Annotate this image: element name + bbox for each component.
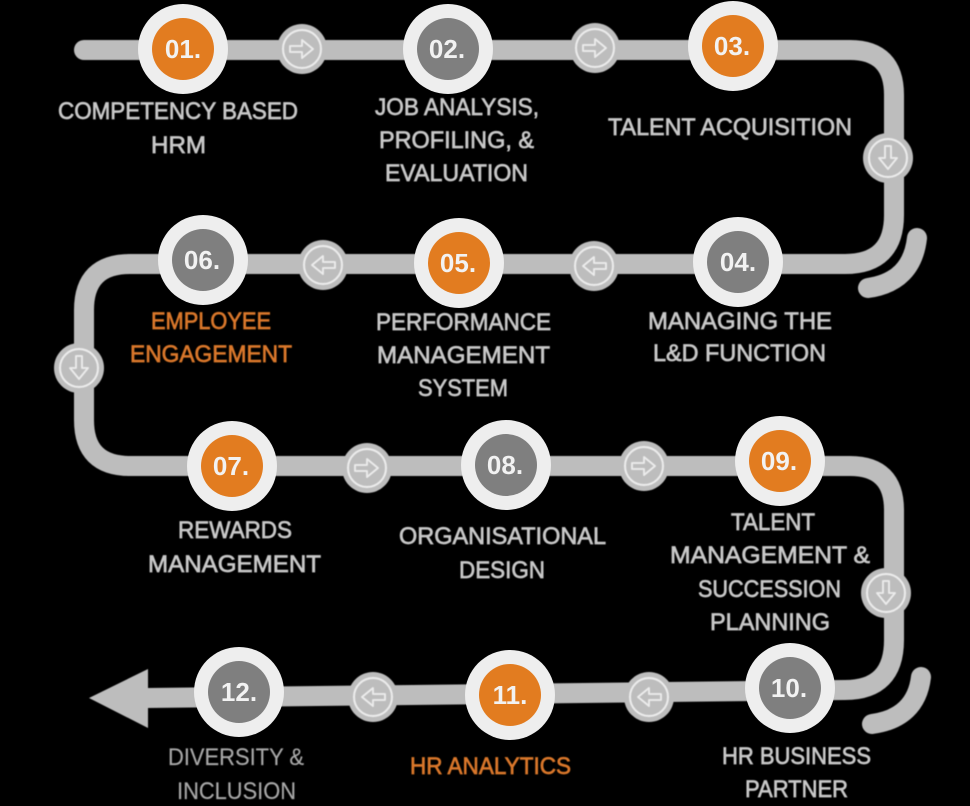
arrow node: 07 to 08 xyxy=(342,443,392,493)
label: job analysis xyxy=(375,94,539,187)
label: employee engagement: EMPLOYEE xyxy=(151,308,271,335)
label: job analysis: PROFILING, & xyxy=(379,127,534,154)
label: talent management and succession planning: SUCCESSION xyxy=(698,576,841,603)
step badge 09: 09. xyxy=(761,446,797,476)
label: talent management and succession planning: MANAGEMENT & xyxy=(670,542,870,569)
step badge 07: 07. xyxy=(213,451,249,481)
step badge 12 xyxy=(194,647,284,737)
step badge 08: 08. xyxy=(487,450,523,480)
step badge 10 xyxy=(745,643,835,733)
step badge 12: 12. xyxy=(221,677,257,707)
label: managing the L&D function xyxy=(648,308,832,367)
label: competency based HRM: COMPETENCY BASED xyxy=(58,98,298,125)
step badge 07 xyxy=(187,421,277,511)
label: talent acquisition: TALENT ACQUISITION xyxy=(608,114,852,141)
label: talent management and succession planning xyxy=(670,509,870,636)
arrow node: 01 to 02 xyxy=(277,24,327,74)
arrow node: 08 to 09 xyxy=(619,441,669,491)
arrow node: 04 to 05 xyxy=(569,241,619,291)
step badge 06 xyxy=(158,215,248,305)
label: job analysis: EVALUATION xyxy=(385,160,528,187)
label: HR business partner: PARTNER xyxy=(745,776,848,803)
curved accent: lower right xyxy=(872,677,921,724)
arrow node: 05 to 06 xyxy=(298,240,348,290)
label: HR business partner: HR BUSINESS xyxy=(722,743,871,770)
step badge 11: 11. xyxy=(493,680,527,710)
label: performance management system: MANAGEMENT xyxy=(377,342,550,369)
label: talent management and succession planning: TALENT xyxy=(731,509,815,536)
label: employee engagement xyxy=(130,308,292,368)
label: managing the L&D function: MANAGING THE xyxy=(648,308,832,335)
step badge 03: 03. xyxy=(714,31,750,61)
end arrowhead xyxy=(89,669,148,728)
label: managing the L&D function: L&D FUNCTION xyxy=(653,340,826,367)
step badge 11 xyxy=(465,650,555,740)
serpentine path xyxy=(84,50,894,728)
step badge 02 xyxy=(403,4,493,94)
step badge 04: 04. xyxy=(720,247,756,277)
curved accent: upper right xyxy=(868,238,917,288)
label: rewards management xyxy=(148,517,321,578)
label: employee engagement: ENGAGEMENT xyxy=(130,341,292,368)
arrow node: 03 to 04 xyxy=(863,133,913,183)
label: HR analytics: HR ANALYTICS xyxy=(410,753,571,780)
step badge 03 xyxy=(688,1,778,91)
step badge 02: 02. xyxy=(429,34,465,64)
label: competency based HRM: HRM xyxy=(151,132,206,159)
label: performance management system xyxy=(376,309,551,402)
step badge 04 xyxy=(693,217,783,307)
arrow node: 09 to 10 xyxy=(861,568,911,618)
label: job analysis: JOB ANALYSIS, xyxy=(375,94,539,121)
arrow node: 02 to 03 xyxy=(570,23,620,73)
step badge 05 xyxy=(414,218,504,308)
step badge 09 xyxy=(735,416,825,506)
label: diversity and inclusion xyxy=(168,744,304,805)
label: rewards management: MANAGEMENT xyxy=(148,551,321,578)
step badge 01: 01. xyxy=(165,34,201,64)
step badge 08 xyxy=(461,420,551,510)
label: organisational design xyxy=(399,523,606,584)
arrow node: 06 to 07 xyxy=(54,343,104,393)
label: diversity and inclusion: INCLUSION xyxy=(177,778,296,805)
label: performance management system: PERFORMANCE xyxy=(376,309,551,336)
step badge 05: 05. xyxy=(440,248,476,278)
step badge 06: 06. xyxy=(184,245,220,275)
label: competency based HRM xyxy=(58,98,298,159)
label: diversity and inclusion: DIVERSITY & xyxy=(168,744,304,771)
label: rewards management: REWARDS xyxy=(178,517,292,544)
arrow node: 11 to 12 xyxy=(348,672,398,722)
label: performance management system: SYSTEM xyxy=(418,375,508,402)
label: organisational design: ORGANISATIONAL xyxy=(399,523,606,550)
label: talent management and succession planning: PLANNING xyxy=(710,609,830,636)
label: HR business partner xyxy=(722,743,871,803)
step badge 10: 10. xyxy=(771,673,807,703)
step badge 01 xyxy=(138,4,228,94)
label: organisational design: DESIGN xyxy=(459,557,545,584)
arrow node: 10 to 11 xyxy=(624,672,674,722)
